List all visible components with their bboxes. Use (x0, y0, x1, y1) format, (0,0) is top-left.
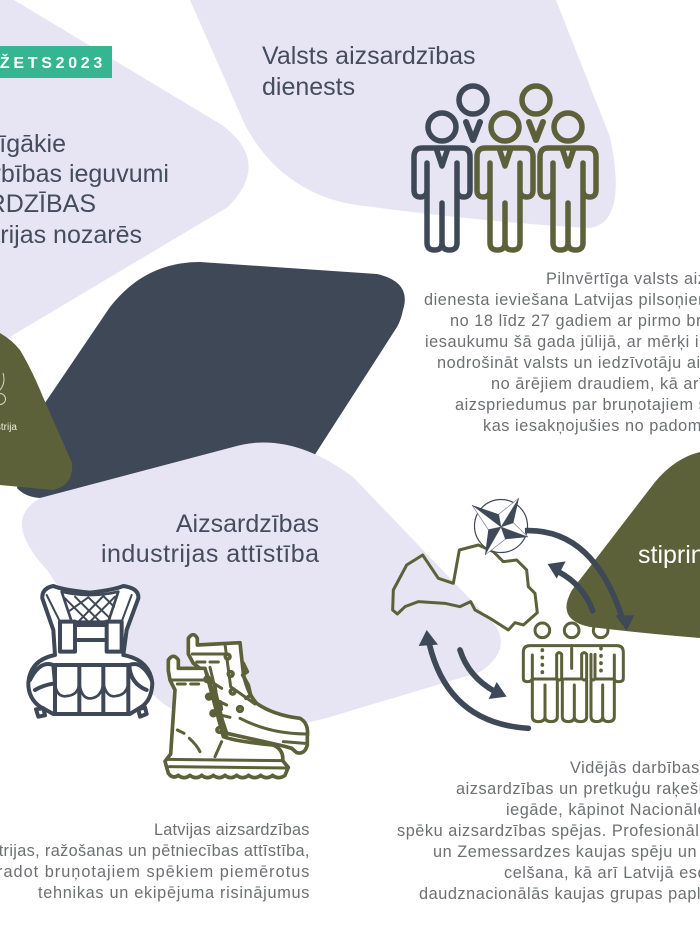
heading: defence industry development: Aizsardzības (176, 510, 319, 538)
person: back right (522, 86, 550, 140)
icon: NATO star (472, 498, 528, 555)
text block: mid-term priorities description (397, 759, 700, 903)
heading: main title (0, 130, 169, 249)
panel: right olive blob (566, 452, 700, 638)
front boot (165, 656, 288, 778)
panel: top-left lavender blob (0, 0, 249, 345)
text block: defence industry description: Latvijas aizsardzības (154, 821, 310, 839)
heading: defence industry development (101, 510, 319, 568)
arrow: soldiers to map (419, 630, 528, 728)
arrow: NATO to soldiers (525, 531, 634, 631)
panel: dark shape (17, 262, 405, 498)
text block: defence industry description: tehnikas un ekipējuma risinājumus (38, 884, 310, 902)
heading: national defence service (262, 42, 476, 101)
person: back left (459, 86, 487, 140)
person: front middle (477, 113, 533, 250)
panel: top lavender blob (190, 0, 616, 228)
heading: national defence service: Valsts aizsardzības (262, 42, 476, 70)
text block: defence industry description (0, 821, 310, 902)
back boot (188, 635, 308, 753)
icon: group of five people (414, 86, 596, 250)
person: front right (540, 113, 596, 250)
text block: defence industry description: radot bruņotajiem spēkiem piemērotus (0, 863, 310, 881)
panel: lower-left lavender blob (22, 442, 501, 729)
icon: ministry emblem (0, 373, 6, 404)
heading: defence industry development: industrijas attīstība (101, 540, 319, 568)
person: front left (414, 113, 470, 250)
panel: left olive blob with ministry logo (0, 333, 72, 490)
icon: tactical vest (28, 586, 152, 717)
diagram: Latvia NATO cycle (393, 498, 634, 728)
heading: national defence service: dienests (262, 73, 355, 101)
icon: Latvia map (393, 545, 537, 630)
icon: three soldiers (523, 623, 623, 722)
text block: national defence service description (424, 270, 700, 435)
arrow: map to soldiers (460, 650, 507, 699)
badge: budget 2023 (0, 46, 112, 78)
icon: pair of boots (165, 635, 308, 778)
arrow: soldiers to NATO (548, 561, 593, 611)
